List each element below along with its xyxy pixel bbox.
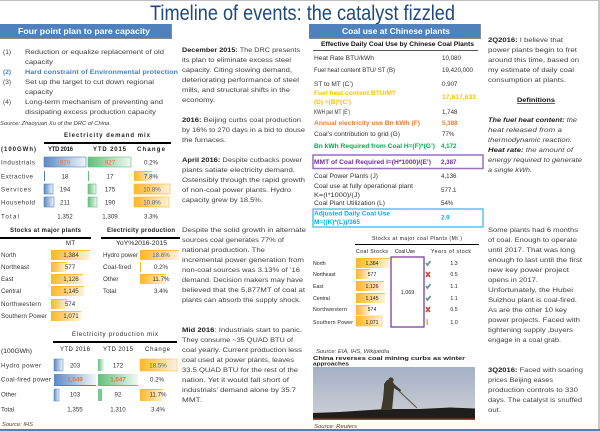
table: electricity demand mix: 7.8% (144, 174, 159, 180)
table: stocks at major plants: 1,145 (63, 288, 79, 295)
callout: MMT of coal required: MMT of Coal Required I=(H*1000)/(E’) (314, 159, 431, 166)
table: effective daily coal use: Coal Power Plants (J) (314, 173, 378, 180)
table: electricity demand mix: 175 (105, 186, 116, 194)
table: stocks at major coal plants: 574 (368, 307, 376, 313)
table: electricity production (101, 228, 180, 295)
text block: definitions: Heat rate: the amount of (488, 147, 574, 154)
table: stocks at major plants: Central (1, 288, 21, 295)
table: electricity production: YoY%2016-2015 (116, 241, 168, 247)
table: effective daily coal use: 5,388 (442, 120, 458, 127)
text block: timeline column: Despite the solid growth in alternate (182, 227, 306, 234)
table: effective daily coal use: 77% (442, 131, 455, 138)
photo: coal worker with rake (313, 367, 475, 420)
heading: coal use (309, 24, 481, 39)
table: electricity production mix: Hydro power (1, 362, 41, 370)
table: electricity production mix: YTD 2016 (60, 347, 91, 353)
table: electricity production mix: 203 (70, 362, 81, 370)
table: stocks at major coal plants: 1.1 (450, 284, 458, 290)
table: electricity demand mix: 10.8% (143, 200, 161, 206)
heading: four point plan: Four point plan to pare capacity (18, 26, 150, 36)
table: electricity demand mix: 211 (60, 200, 70, 206)
table: electricity production mix: 1,049 (67, 376, 83, 384)
table: electricity demand mix: 194 (60, 186, 71, 194)
table: electricity production mix: Electricity production mix (72, 332, 158, 338)
table: effective daily coal use: 0.907 (442, 81, 458, 88)
table: effective daily coal use: Effective Daily Coal Use by Chinese Coal Plants (321, 42, 475, 48)
text block: 3Q2016: days. The catalyst is snuffed (488, 397, 582, 404)
text block: 2Q2016: consumption at plants. (488, 77, 566, 84)
text block: 2Q2016: 2Q2016: I believe that (488, 37, 563, 44)
text block: 2Q2016: around this time, based on (488, 57, 579, 64)
table: effective daily coal use: (D) =(B)*(C’) (314, 99, 351, 106)
text block: some plants: engage in a coal grab. (488, 337, 561, 344)
table: electricity demand mix (1, 133, 171, 220)
table: stocks at major plants: Northeast (1, 264, 29, 271)
text block: timeline column: coal used at power plants, leaves (182, 357, 295, 364)
text block: definitions: a single kWh. (488, 167, 532, 174)
text block: timeline column: Ostensibly through the rapid growth (182, 177, 305, 184)
callout: MMT of coal required: 2,387 (441, 159, 457, 166)
table: stocks at major coal plants: Northwestern (313, 307, 347, 313)
table: electricity demand mix: YTD 2016 (48, 147, 74, 153)
text block: timeline column: April 2016: Despite cutbacks power (182, 157, 303, 164)
bottom bar (0, 429, 600, 431)
text block: some plants (488, 227, 582, 344)
table: electricity demand mix: Total (1, 214, 19, 220)
table: electricity demand mix: (100GWh) (1, 147, 36, 153)
table: stocks at major coal plants: 1.0 (450, 320, 458, 326)
callout: coal use box: 1,069 (401, 290, 414, 296)
text block: plan list: dissipating excess production capacity (25, 109, 157, 116)
table: electricity demand mix: 3.3% (144, 214, 159, 220)
text block: plan list: Hard constraint of Environmental protection (25, 69, 178, 76)
callout: coal use box (391, 257, 424, 327)
source note: Source: EIA, IHS, Wikipedia (316, 349, 389, 355)
table: electricity production mix: Other (1, 392, 16, 398)
text block: timeline column: mills, and structural shifts in the (182, 87, 290, 94)
text block: some plants: Suizhou plant is coal-fired. (488, 297, 577, 304)
table: electricity production mix: YTD 2015 (103, 347, 134, 353)
table: stocks at major plants: 577 (65, 264, 76, 271)
table: effective daily coal use: 1,748 (442, 109, 458, 116)
text block: plan list: (3) (3, 79, 11, 86)
table: electricity demand mix: 190 (105, 200, 116, 206)
heading: coal use: Coal use at Chinese plants (342, 26, 450, 36)
text block: 3Q2016: 3Q2016: Faced with soaring (488, 367, 583, 374)
table: stocks at major coal plants: 1,071 (366, 320, 379, 326)
table: electricity production mix: 11.7% (149, 392, 167, 398)
text block: 2Q2016: my estimate of daily coal (488, 67, 575, 74)
text block: timeline column: believed that the 5,877MT of coal at (182, 287, 305, 294)
table: effective daily coal use: ST to MT (C’) (314, 81, 353, 88)
table: electricity production: 3.4% (154, 288, 169, 295)
table: electricity demand mix: 10.8% (143, 186, 161, 194)
text block: definitions: The fuel heat content: the (488, 117, 577, 124)
text block: timeline column: MMT. (182, 397, 202, 404)
table: electricity demand mix: Change (137, 147, 166, 153)
table: electricity demand mix: Industrials (1, 160, 35, 166)
table: stocks at major plants: 1,071 (63, 313, 79, 320)
table: electricity production: 0.2% (154, 264, 169, 271)
text block: timeline column: December 2015: The DRC presents (182, 47, 301, 54)
table: stocks at major coal plants: 1.1 (450, 296, 458, 302)
text block: timeline column: national production. The (182, 247, 265, 254)
text block: timeline column: They consume ~35 QUAD BTU of (182, 337, 293, 344)
table: stocks at major coal plants: 1,145 (366, 296, 379, 302)
table: electricity production mix: 172 (113, 362, 124, 370)
table: effective daily coal use (313, 42, 483, 227)
table: electricity demand mix: 1,352 (57, 214, 73, 220)
table: electricity production mix: 3.4% (151, 406, 166, 414)
table: electricity production mix: (100GWh) (1, 349, 32, 355)
table: effective daily coal use: Bn kWh Required from Coal H=(F)*(G’) (314, 143, 435, 150)
table: effective daily coal use: 577.1 (441, 187, 457, 194)
text block: some plants: enough to last until the first (488, 257, 582, 264)
text block: plan list: (1) (3, 49, 11, 56)
text block: plan list: Set up the target to cut down regional (25, 79, 155, 86)
table: stocks at major plants: East (1, 276, 14, 283)
table: stocks at major coal plants: Stocks at major coal Plants (Mt ) (372, 236, 462, 242)
text block: some plants: of coal. Enough to operate (488, 237, 577, 244)
table: stocks at major plants: 574 (65, 301, 76, 308)
text block: some plants: opens in 2017. (488, 277, 538, 284)
icons: stock status (426, 261, 430, 325)
table: effective daily coal use: 17,617,633 (442, 94, 477, 101)
table: stocks at major coal plants: Southern Power (313, 320, 353, 326)
callout: MMT of coal required (313, 155, 483, 168)
text block: 3Q2016: out. (488, 407, 501, 414)
table: electricity production: 11.7% (152, 276, 170, 283)
table: electricity demand mix: 0.2% (144, 160, 159, 166)
text block: timeline column: the furnaces. (182, 137, 226, 144)
text block: plan list: capacity (25, 89, 54, 96)
text block: plan list: Long-term mechanism of preventing and (25, 99, 163, 106)
table: electricity production mix: Coal-fired power (1, 376, 51, 384)
table: electricity production: Total (103, 288, 116, 295)
table: stocks at major coal plants: 1,126 (366, 284, 379, 290)
table: stocks at major coal plants: Coal Stocks (356, 249, 388, 255)
table: electricity production mix: Total (1, 406, 14, 414)
table: stocks at major plants: Northwestern (1, 301, 42, 308)
text block: some plants: Unfortunately, the Hubei (488, 287, 574, 294)
text block: timeline column: Mid 2016 : Industrials start to panic. (182, 327, 302, 334)
text block: some plants: As are the other 10 key (488, 307, 568, 314)
text block: timeline column: capacity. Citing slowing demand, (182, 67, 292, 74)
text block: timeline column: non-coal sources was 3.13% of ’16 (182, 267, 300, 274)
text block: timeline column (182, 47, 306, 404)
table: electricity production: Hydro power (103, 252, 138, 259)
table: stocks at major coal plants: 577 (368, 272, 376, 278)
table: electricity production mix: 18.5% (149, 362, 167, 370)
text block: some plants: Some plants had 6 months (488, 227, 579, 234)
table: stocks at major coal plants: 0.5 (450, 272, 458, 278)
table: effective daily coal use: Fuel heat content BTU/MT (314, 90, 396, 97)
table: effective daily coal use: Annual electricity use Bn kWh (F) (314, 120, 420, 127)
table: electricity demand mix: 927 (105, 160, 116, 166)
table: electricity production mix: 1,355 (67, 406, 83, 414)
text block: some plants: new key power project (488, 267, 569, 274)
text block: definitions: Definitions (517, 97, 555, 104)
text block: some plants: until 2017. That was long (488, 247, 575, 254)
text block: plan list: (2) (3, 69, 11, 76)
text block: timeline column: of non-coal power plants. Hydro (182, 187, 291, 194)
text block: definitions: heat released from a (488, 127, 562, 134)
table: stocks at major coal plants: 1,384 (366, 261, 379, 267)
text block: definitions (488, 97, 582, 174)
text block: some plants: power projects. Faced with (488, 317, 580, 324)
text block: timeline column: nation. Yet it would fall short of (182, 377, 289, 384)
callout: adjusted daily coal use: M=((K)*(L))/365 (314, 219, 361, 226)
text block: timeline column: capacity grew by 18.5%. (182, 197, 263, 204)
table: effective daily coal use: Coal’s contribution to grid (G) (314, 131, 400, 138)
table: electricity demand mix: Services (1, 186, 31, 194)
text block: definitions: energy required to generate (488, 157, 582, 164)
text block: timeline column: deteriorating performance of steel (182, 77, 300, 84)
text block: timeline column: economy. (182, 97, 215, 104)
text block: definitions: thermodynamic reaction. (488, 137, 572, 144)
text block: timeline column: its plan to eliminate excess steel (182, 57, 292, 64)
table: effective daily coal use: 4,172 (441, 143, 457, 150)
table: stocks at major coal plants: Coal Use (395, 249, 415, 255)
text block: timeline column: coal yearly. Current production less (182, 347, 303, 354)
source note: Source: IHS (2, 422, 33, 428)
table: electricity production: Electricity production (107, 228, 175, 234)
table: electricity demand mix: Extractive (1, 174, 34, 180)
table: electricity demand mix: 17 (107, 174, 114, 180)
text block: plan list (3, 49, 178, 116)
title: Timeline of events: the catalyst fizzled (150, 2, 455, 25)
table: stocks at major coal plants: Central (313, 296, 330, 302)
table: electricity production mix: 1,047 (110, 376, 126, 384)
table: stocks at major plants: MT (66, 241, 75, 247)
text block: 2Q2016: power plants begin to fret (488, 47, 577, 54)
text: approaches (313, 362, 349, 368)
heading: four point plan (0, 24, 172, 39)
table: electricity production: Coal-fired (103, 264, 132, 271)
table: electricity production: 18.6% (152, 252, 170, 259)
table: stocks at major plants: 1,384 (63, 252, 79, 259)
text block: 3Q2016 (488, 367, 583, 414)
table: stocks at major plants: 1,126 (63, 276, 79, 283)
table: electricity production mix: 92 (115, 392, 122, 398)
table: electricity production mix: 1,310 (110, 406, 126, 414)
source note: Source: Zhaoyuan Xu of the DRC of China. (0, 121, 111, 127)
panel: coal use at Chinese plants (309, 24, 483, 227)
text block: 2Q2016 (488, 37, 579, 84)
text block: timeline column: sources coal generates 77% of (182, 237, 284, 244)
table: effective daily coal use: 19,420,000 (442, 67, 474, 74)
text block: timeline column: industrials’ demand alone by 35.7 (182, 387, 296, 394)
table: electricity production mix: 103 (70, 392, 81, 398)
table: effective daily coal use: K=(I*1000)/(J) (314, 192, 360, 199)
table: electricity demand mix: 1,309 (102, 214, 118, 220)
table: electricity demand mix: Household (1, 200, 36, 206)
table: electricity production: Other (103, 276, 118, 283)
table: effective daily coal use: 54% (441, 200, 454, 207)
table: stocks at major coal plants: East (313, 284, 324, 290)
table: effective daily coal use: Heat Rate BTU/kWh (314, 55, 375, 62)
text block: timeline column: 2016: Beijing curbs coal production (182, 117, 301, 124)
text block: plan list: Reduction or equalize replacement of old (25, 49, 164, 56)
table: stocks at major coal plants: Northeast (313, 272, 336, 278)
text block: plan list: (4) (3, 99, 11, 106)
photo caption: China reverses coal mining curbs as winter (313, 356, 466, 362)
table: electricity demand mix: YTD 2015 (93, 147, 127, 153)
text block: plan list: capacity (25, 59, 54, 66)
table: effective daily coal use: KWH per MT (E’) (314, 109, 350, 116)
table: stocks at major coal plants: 1.3 (450, 261, 458, 267)
table: stocks at major plants: Stocks at major plants (10, 228, 82, 234)
table: electricity demand mix: 18 (62, 174, 69, 180)
text block: 3Q2016: prices Beijing eases (488, 377, 554, 384)
table: electricity production mix (1, 332, 177, 414)
text block: some plants: tightening supply ,buyers (488, 327, 574, 334)
table: stocks at major plants (0, 228, 91, 321)
table: effective daily coal use: 4,136 (441, 173, 457, 180)
table: effective daily coal use: Coal use at fully operational plant (314, 183, 413, 190)
table: effective daily coal use: Coal Plant Utilization (L) (314, 200, 385, 207)
table: effective daily coal use: 10,080 (442, 55, 461, 62)
table: stocks at major coal plants: Years of stock (431, 249, 471, 255)
panel: four point plan (0, 24, 178, 127)
table: electricity demand mix: Electricity demand mix (64, 133, 151, 139)
table: stocks at major plants: Southern Power (1, 313, 47, 320)
table: stocks at major coal plants (313, 236, 479, 327)
table: electricity production mix: 0.2% (150, 376, 165, 384)
text block: timeline column: plants satiate electricity demand. (182, 167, 295, 174)
table: stocks at major coal plants: North (313, 261, 326, 267)
callout: adjusted daily coal use: Adjusted Daily Coal Use (314, 210, 391, 218)
text block: timeline column: incremental power generation from (182, 257, 305, 264)
text block: 3Q2016: production controls to 330 (488, 387, 578, 394)
table: stocks at major plants: North (1, 252, 17, 259)
text block: timeline column: by 16% to 270 days in a bid to douse (182, 127, 305, 134)
table: stocks at major coal plants: 0.5 (450, 307, 458, 313)
table: effective daily coal use: Fuel heat content BTU/ ST (B) (314, 67, 395, 74)
callout: adjusted daily coal use (313, 209, 483, 227)
table: electricity production mix: Change (145, 347, 171, 353)
text block: timeline column: 33.5 QUAD BTU for the rest of the (182, 367, 298, 374)
text block: timeline column: plants can absorb the supply shock. (182, 297, 301, 304)
callout: adjusted daily coal use: 2.9 (441, 214, 450, 222)
table: electricity demand mix: 929 (60, 160, 71, 166)
text block: timeline column: demand. Decision makers may have (182, 277, 303, 284)
source note: Source: Reuters (314, 424, 357, 430)
